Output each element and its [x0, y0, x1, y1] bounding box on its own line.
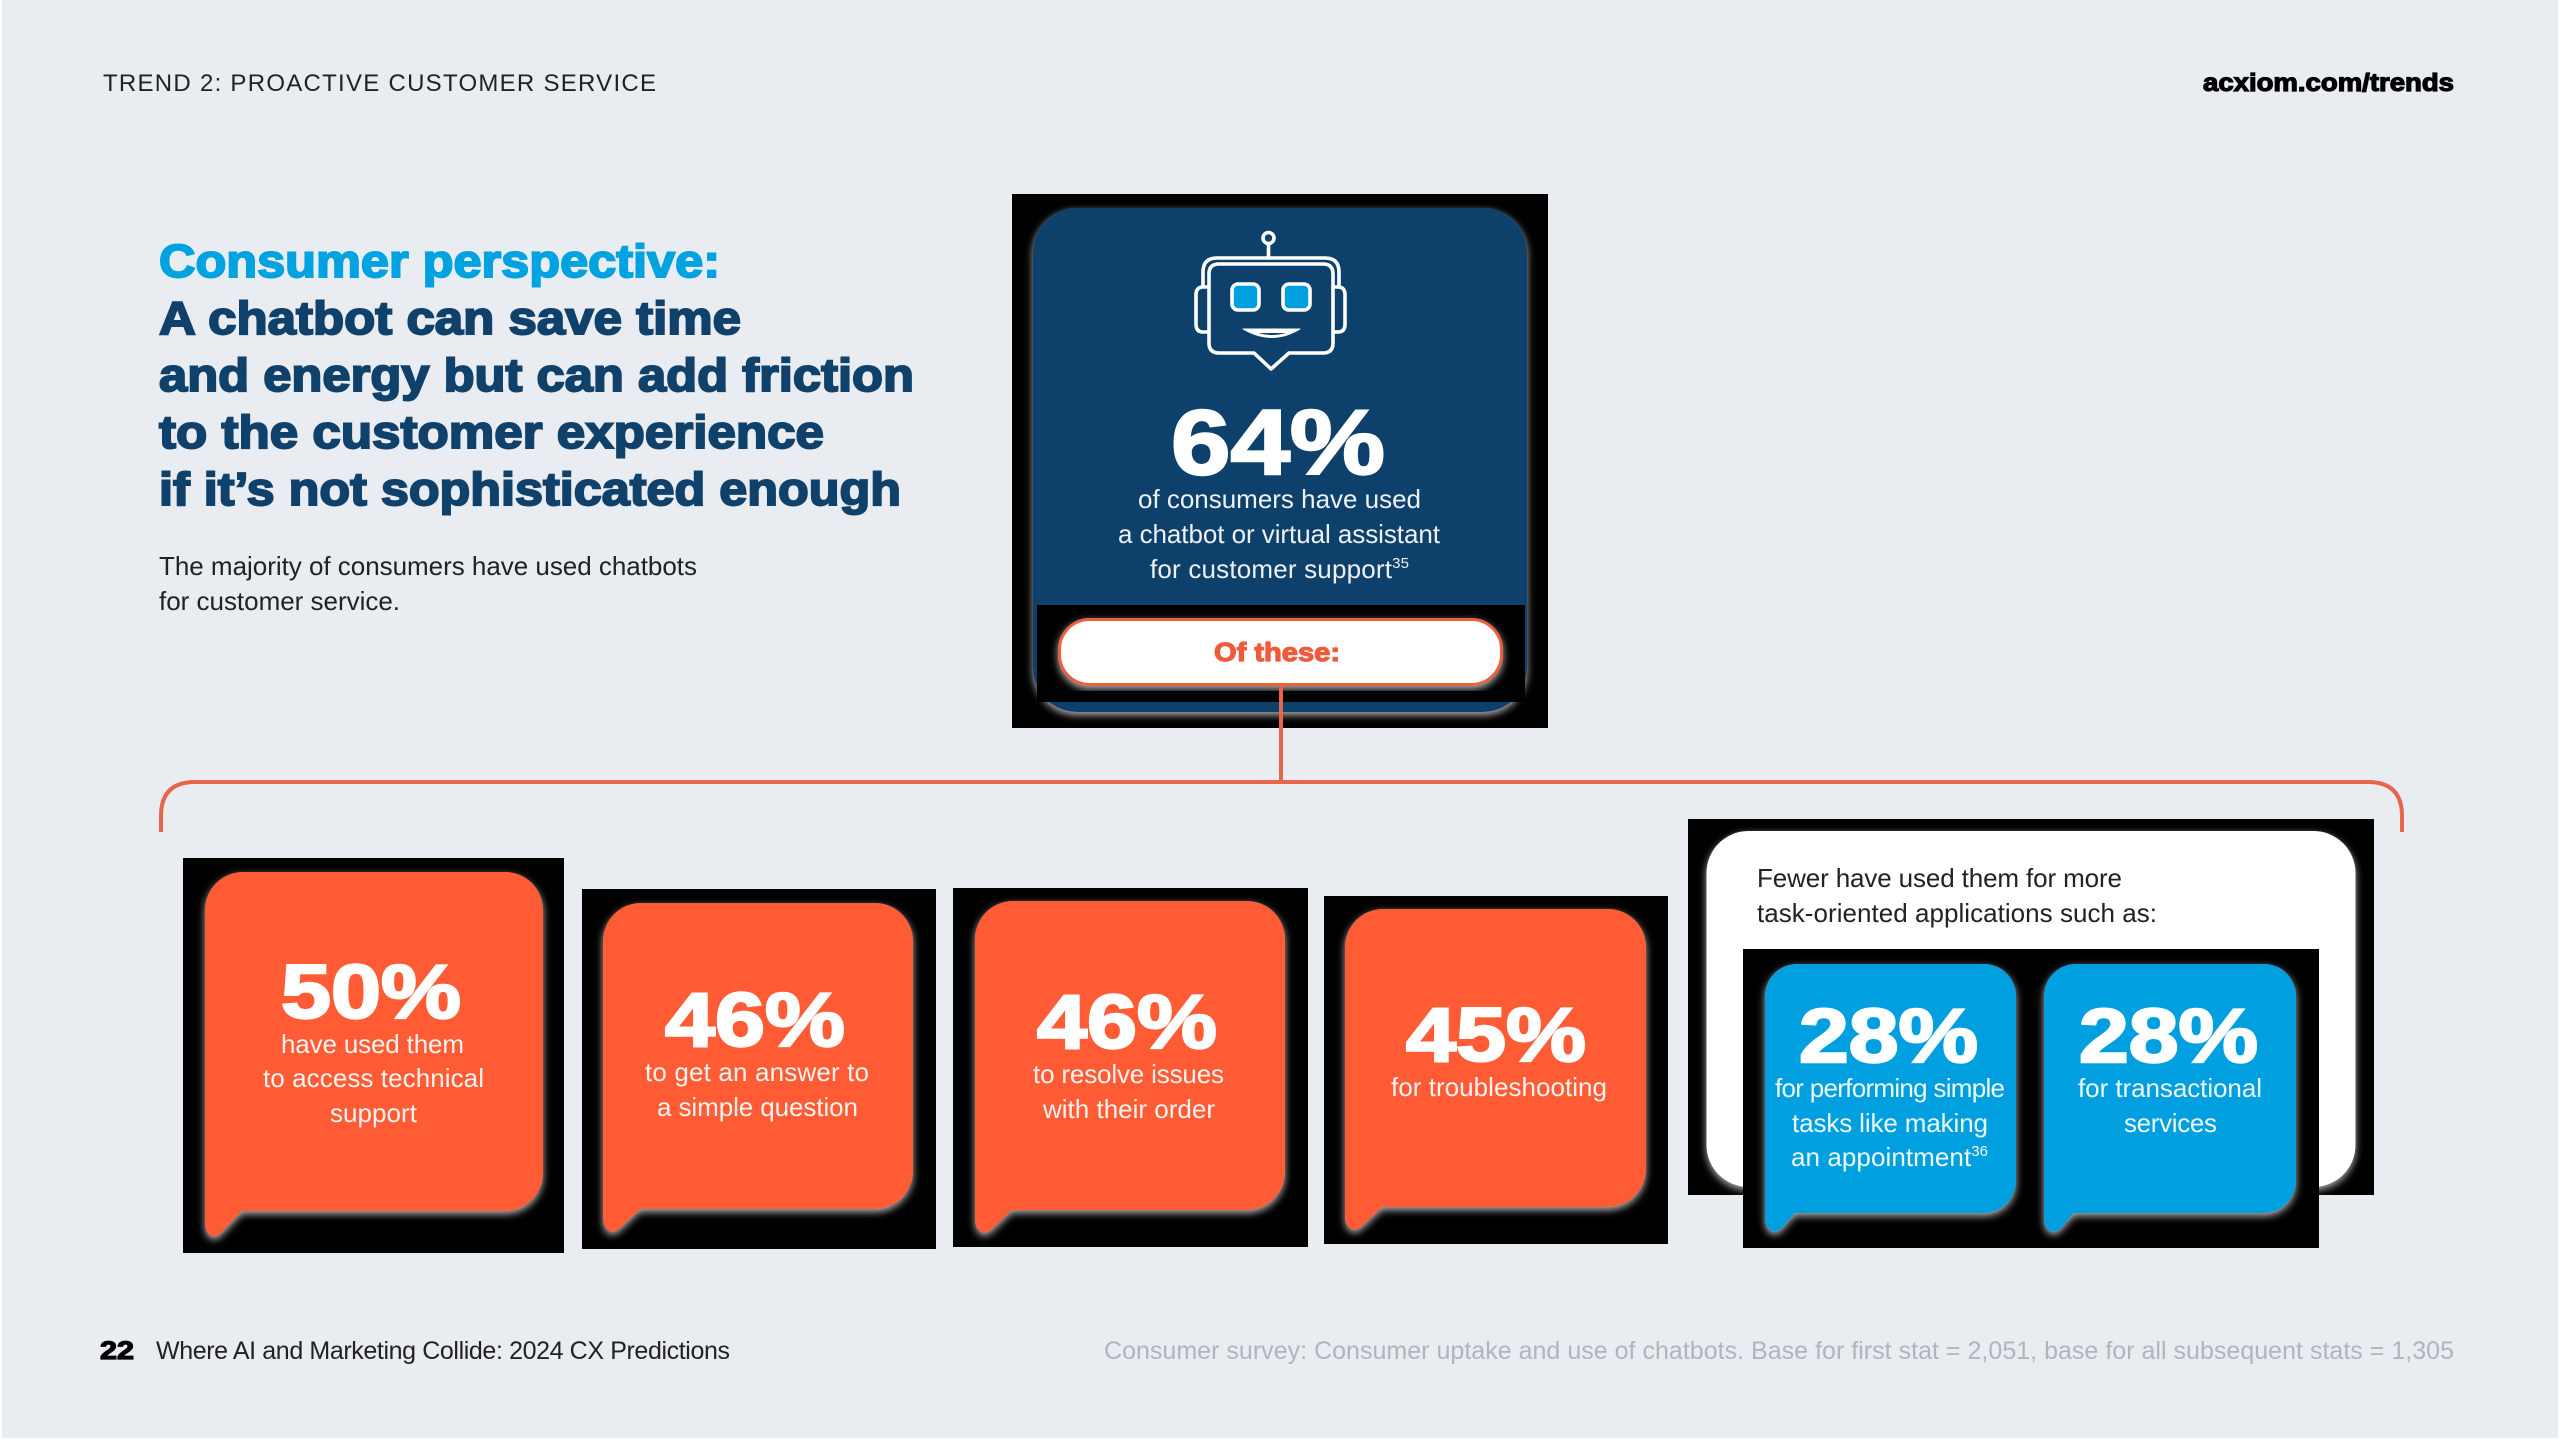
stat: 28% transactional	[2044, 964, 2296, 1232]
stat: 28% transactional: for transactional	[2078, 1073, 2262, 1103]
title: to the customer experience	[159, 406, 824, 458]
panel: 64% headline stat: of consumers have used	[1138, 484, 1421, 514]
header: section label: TREND 2: PROACTIVE CUSTOMER SERVICE	[103, 70, 656, 97]
title: A chatbot can save time	[159, 292, 741, 344]
panel: 46% resolve issues: with their order	[1042, 1094, 1215, 1124]
panel: 46% simple question: 46%	[665, 978, 845, 1063]
panel: 50% technical support	[183, 858, 564, 1253]
connector bracket	[161, 686, 2402, 832]
title: and energy but can add friction	[159, 349, 914, 401]
stat: 28% transactional: services	[2124, 1108, 2217, 1138]
panel: 64% headline stat: 64%	[1171, 392, 1385, 494]
panel: 46% simple question: to get an answer to	[645, 1057, 869, 1087]
intro text: The majority of consumers have used chatbots	[159, 551, 697, 581]
panel: 46% resolve issues: to resolve issues	[1033, 1059, 1224, 1089]
panel: task-oriented applications: task-oriented applications such as:	[1757, 898, 2157, 928]
intro text	[159, 551, 697, 616]
title: if it’s not sophisticated enough	[159, 463, 901, 515]
stat: 28% simple tasks	[1765, 964, 2016, 1232]
panel: 50% technical support: to access technical	[263, 1063, 484, 1093]
stat: 28% transactional: 28%	[2079, 994, 2258, 1079]
callout: of these	[1060, 620, 1502, 684]
panel: 46% resolve issues	[953, 888, 1308, 1247]
stat: 28% simple tasks: an appointment	[1791, 1142, 1971, 1172]
footer: document title: Where AI and Marketing Collide: 2024 CX Predictions	[156, 1337, 730, 1365]
stat: 28% simple tasks: 36	[1971, 1143, 1988, 1160]
panel: 64% headline stat: 35	[1392, 555, 1409, 572]
header: url: acxiom.com/trends	[2203, 69, 2454, 97]
panel: task-oriented applications	[1688, 819, 2374, 1248]
panel: 46% simple question	[582, 889, 936, 1249]
footer: page number: 22	[100, 1337, 134, 1365]
panel: 64% headline stat	[1012, 194, 1548, 728]
title: Consumer perspective:	[159, 235, 720, 287]
intro text: for customer service.	[159, 586, 400, 616]
panel: 50% technical support: 50%	[281, 950, 461, 1035]
callout: of these: Of these:	[1214, 637, 1340, 667]
panel: 46% resolve issues: 46%	[1037, 980, 1217, 1065]
stat: 28% simple tasks: 28%	[1799, 994, 1978, 1079]
stat: 28% simple tasks: for performing simple	[1775, 1073, 2005, 1103]
icon: chatbot robot	[1196, 232, 1345, 369]
stat: 28% simple tasks: tasks like making	[1792, 1108, 1988, 1138]
title	[159, 235, 914, 515]
panel: 50% technical support: support	[330, 1098, 418, 1128]
panel: 64% headline stat: for customer support	[1150, 554, 1392, 584]
panel: 64% headline stat: a chatbot or virtual assistant	[1118, 519, 1441, 549]
panel: 45% troubleshooting: for troubleshooting	[1391, 1072, 1607, 1102]
panel: 45% troubleshooting	[1324, 896, 1668, 1244]
panel: task-oriented applications: Fewer have used them for more	[1757, 863, 2122, 893]
panel: 45% troubleshooting: 45%	[1406, 993, 1586, 1078]
panel: 46% simple question: a simple question	[657, 1092, 858, 1122]
panel: 50% technical support: have used them	[281, 1029, 464, 1059]
footer: source note: Consumer survey: Consumer uptake and use of chatbots. Base for first stat = 2,051, base for all subsequent stats = 1,305	[1104, 1337, 2454, 1365]
